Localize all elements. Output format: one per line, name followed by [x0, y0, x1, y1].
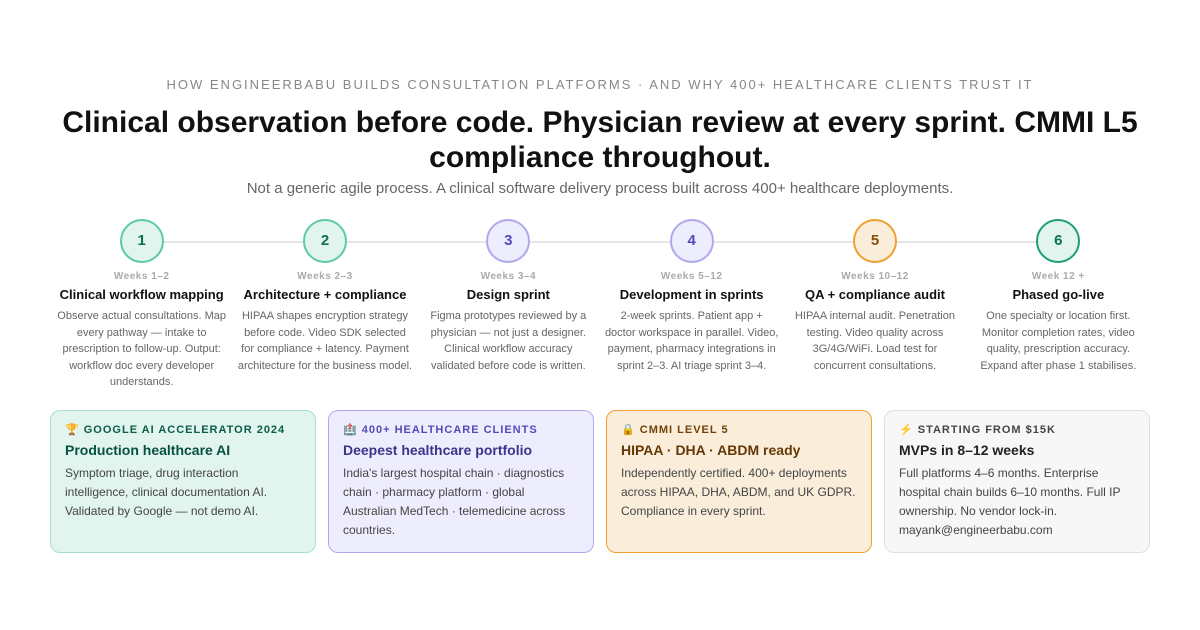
step 4: development in sprints: Development in sprints [620, 287, 764, 302]
step 2: architecture + compliance: 2 [321, 232, 329, 249]
step 6: phased go-live: Monitor completion rates, video [982, 326, 1135, 338]
panel: starting price: hospital chain builds 6–10 months. Full IP [899, 485, 1120, 499]
step 4: development in sprints: sprint 2–3. AI triage sprint 3–4. [617, 360, 766, 372]
step 4: development in sprints: doctor workspace in parallel. Video, [605, 326, 778, 338]
panel: Google AI accelerator [50, 410, 316, 553]
panel: CMMI level 5 [606, 410, 872, 553]
step 5: QA + compliance audit: 3G/4G/WiFi. Load test for [813, 343, 937, 355]
step 6: phased go-live [980, 219, 1136, 372]
step 3: design sprint: Clinical workflow accuracy [444, 343, 572, 355]
panel: CMMI level 5: across HIPAA, DHA, ABDM, and UK GDPR. [621, 485, 856, 499]
panel: healthcare clients: India's largest hospital chain · diagnostics [343, 466, 564, 480]
step 2: architecture + compliance: Weeks 2–3 [297, 271, 353, 282]
panel: CMMI level 5: 🔒 CMMI LEVEL 5 [621, 424, 729, 436]
step 6: phased go-live: Week 12 + [1032, 271, 1085, 282]
panel: starting price: Full platforms 4–6 months. Enterprise [899, 466, 1098, 480]
eyebrow heading: HOW ENGINEERBABU BUILDS CONSULTATION PLATFORMS · AND WHY 400+ HEALTHCARE CLIENTS TRUST IT [166, 77, 1034, 92]
panel: healthcare clients: countries. [343, 523, 395, 537]
step 1: clinical workflow mapping: understands. [110, 376, 173, 388]
step 2: architecture + compliance: Architecture + compliance [244, 287, 406, 302]
panel: CMMI level 5: Compliance in every sprint. [621, 504, 766, 518]
step 2: architecture + compliance: before code. Video SDK selected [244, 326, 406, 338]
step 1: clinical workflow mapping: Clinical workflow mapping [60, 287, 224, 302]
step 3: design sprint: Figma prototypes reviewed by a [430, 310, 586, 322]
panel: starting price: ownership. No vendor lock-in. [899, 504, 1057, 518]
step 3: design sprint: 3 [504, 232, 512, 249]
panel: starting price [884, 410, 1150, 553]
panel: CMMI level 5: Independently certified. 400+ deployments [621, 466, 847, 480]
panel: CMMI level 5: HIPAA · DHA · ABDM ready [621, 442, 800, 458]
step 3: design sprint: physician — not just a designer. [431, 326, 586, 338]
step 4: development in sprints [605, 219, 778, 372]
panel: healthcare clients: Australian MedTech · telemedicine across [343, 504, 565, 518]
step 4: development in sprints: 2-week sprints. Patient app + [621, 310, 763, 322]
step 1: clinical workflow mapping: prescription to follow-up. Output: [62, 343, 221, 355]
step 5: QA + compliance audit [795, 219, 955, 372]
panel: starting price: mayank@engineerbabu.com [899, 523, 1053, 537]
timeline connector line [142, 241, 1058, 243]
step 1: clinical workflow mapping: Weeks 1–2 [114, 271, 169, 282]
panel: healthcare clients [328, 410, 594, 553]
panel: healthcare clients: chain · pharmacy platform · global [343, 485, 524, 499]
step 6: phased go-live: 6 [1054, 232, 1062, 249]
panel: healthcare clients: Deepest healthcare portfolio [343, 442, 532, 458]
step 6: phased go-live: One specialty or location first. [986, 310, 1130, 322]
step 1: clinical workflow mapping: every pathway — intake to [77, 326, 206, 338]
step 2: architecture + compliance [238, 219, 412, 372]
step 1: clinical workflow mapping: workflow doc every developer [69, 360, 214, 372]
step 2: architecture + compliance: HIPAA shapes encryption strategy [242, 310, 408, 322]
panel: starting price: ⚡ STARTING FROM $15K [899, 424, 1056, 436]
step 4: development in sprints: Weeks 5–12 [661, 271, 722, 282]
step 4: development in sprints: 4 [687, 232, 696, 249]
panel: Google AI accelerator: Production healthcare AI [65, 442, 230, 458]
panel: Google AI accelerator: Validated by Google — not demo AI. [65, 504, 258, 518]
panel: Google AI accelerator: Symptom triage, drug interaction [65, 466, 238, 480]
step 3: design sprint [430, 219, 586, 372]
title: Clinical observation before code. Physician review at every sprint. CMMI L5 compliance throughout. [62, 106, 1138, 174]
panel: Google AI accelerator: intelligence, clinical documentation AI. [65, 485, 267, 499]
step 3: design sprint: Weeks 3–4 [481, 271, 536, 282]
step 1: clinical workflow mapping [57, 219, 226, 388]
step 6: phased go-live: Expand after phase 1 stabilises. [980, 360, 1136, 372]
panel: Google AI accelerator: 🏆 GOOGLE AI ACCELERATOR 2024 [65, 424, 285, 436]
panel: starting price: MVPs in 8–12 weeks [899, 442, 1034, 458]
step 5: QA + compliance audit: QA + compliance audit [805, 287, 945, 302]
step 5: QA + compliance audit: concurrent consultations. [814, 360, 936, 372]
panel: healthcare clients: 🏥 400+ HEALTHCARE CLIENTS [343, 424, 538, 436]
subtitle: Not a generic agile process. A clinical software delivery process built across 400+ healthcare deployments. [247, 180, 953, 197]
step 5: QA + compliance audit: Weeks 10–12 [841, 271, 909, 282]
step 3: design sprint: validated before code is written. [431, 360, 586, 372]
step 1: clinical workflow mapping: Observe actual consultations. Map [57, 310, 226, 322]
step 5: QA + compliance audit: HIPAA internal audit. Penetration [795, 310, 955, 322]
step 6: phased go-live: quality, prescription accuracy. [987, 343, 1130, 355]
step 5: QA + compliance audit: testing. Video quality across [807, 326, 943, 338]
step 6: phased go-live: Phased go-live [1012, 287, 1104, 302]
step 2: architecture + compliance: architecture for the business model. [238, 360, 412, 372]
step 1: clinical workflow mapping: 1 [137, 232, 146, 249]
step 3: design sprint: Design sprint [467, 287, 550, 302]
step 5: QA + compliance audit: 5 [871, 232, 879, 249]
step 4: development in sprints: payment, pharmacy integrations in [608, 343, 776, 355]
step 2: architecture + compliance: for compliance + latency. Payment [241, 343, 409, 355]
